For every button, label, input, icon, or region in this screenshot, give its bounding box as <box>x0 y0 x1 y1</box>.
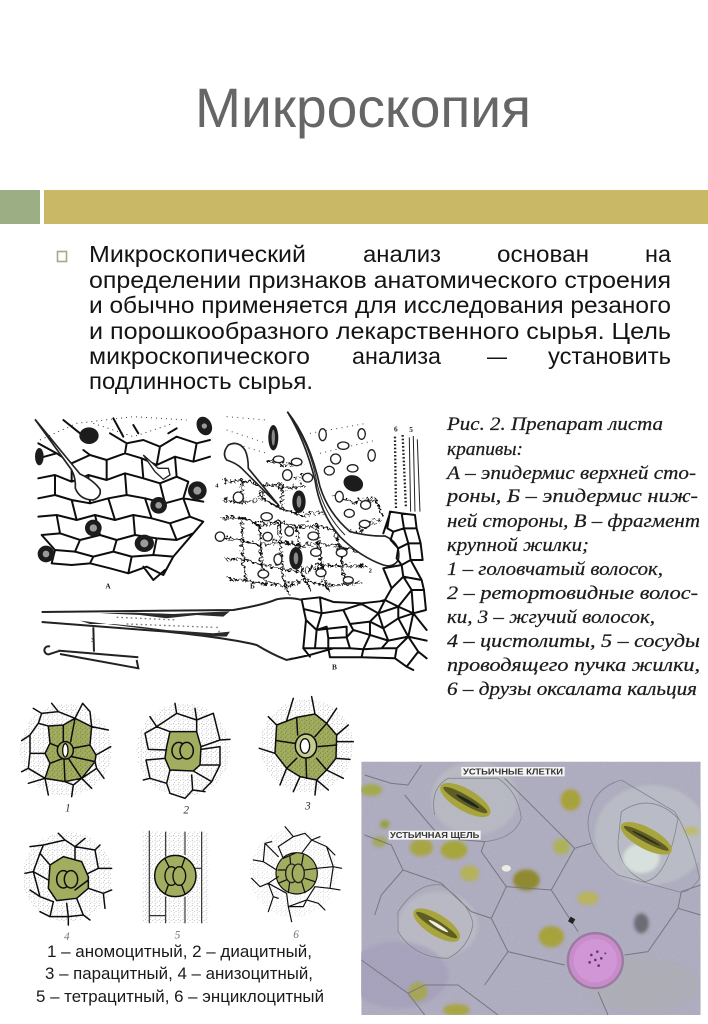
body text: анализ <box>363 241 441 267</box>
icon: retort hair <box>35 419 100 500</box>
figure caption: крупной жилки; <box>447 535 589 556</box>
legend of stomatal types: 3 – парацитный, 4 – анизоцитный, <box>45 964 313 983</box>
panel B: lower epidermis: 2 <box>369 568 373 575</box>
figure: nettle leaf preparation <box>35 412 427 671</box>
green square <box>0 190 40 224</box>
icon: capitate hair small <box>143 455 170 479</box>
stoma type 5 <box>143 831 208 923</box>
type numerals: 2 <box>183 804 189 816</box>
body text <box>89 241 671 394</box>
type numerals: 6 <box>293 929 299 941</box>
type numerals: 4 <box>64 931 70 943</box>
stoma type 4 <box>23 832 113 925</box>
dotted top edge B <box>227 417 377 453</box>
panel V: vein fragment <box>42 424 427 671</box>
pink stained cell <box>567 932 624 989</box>
background tonal patches <box>595 785 708 885</box>
title: Микроскопия <box>195 76 531 139</box>
figure caption: Рис. 2. Препарат листа <box>446 414 663 435</box>
stoma type 1 <box>20 703 112 797</box>
body text: Микроскопический <box>89 241 306 267</box>
bullet marker <box>58 252 66 262</box>
stoma type 3 <box>259 697 353 795</box>
type numerals: 1 <box>65 803 71 815</box>
figure caption: ки, 3 – жгучий волосок, <box>447 607 655 628</box>
figure: stomatal types <box>20 697 353 943</box>
figure caption: крапивы: <box>447 439 523 460</box>
dotted top edge <box>40 417 187 440</box>
pale guard cell halo <box>623 843 660 873</box>
figure caption: 1 – головчатый волосок, <box>447 559 663 580</box>
body text: основан <box>497 241 589 267</box>
body text: анализа <box>352 343 441 369</box>
stinging hair <box>42 598 302 660</box>
panel V: vein fragment: 5 <box>409 425 413 434</box>
body text: и обычно применяется для исследования резаного <box>89 292 671 318</box>
panel label B: Б <box>250 581 255 590</box>
figure caption: роны, Б – эпидермис ниж- <box>445 486 698 507</box>
panel A: upper epidermis <box>35 414 215 590</box>
cell walls <box>361 765 701 1015</box>
figure caption: 4 – цистолиты, 5 – сосуды <box>447 631 700 652</box>
stoma type 6 <box>249 827 342 922</box>
legend of stomatal types: 1 – аномоцитный, 2 – диацитный, <box>47 942 312 961</box>
figure caption: проводящего пучка жилки, <box>447 655 700 676</box>
panel label A: А <box>105 581 111 590</box>
micrograph of stomata <box>348 762 708 1016</box>
panel B: lower epidermis: 4 <box>215 482 219 489</box>
callout: guard cells: УСТЬИЧНЫЕ КЛЕТКИ <box>463 768 563 777</box>
stoma type 2 <box>137 703 230 798</box>
panel V: vein fragment: В <box>332 662 337 671</box>
figure caption <box>445 414 700 700</box>
gold bar <box>44 190 708 224</box>
vein cells <box>290 512 427 670</box>
callout: stomatal pore: УСТЬИЧНАЯ ЩЕЛЬ <box>390 831 480 840</box>
icon: stomata <box>215 429 375 583</box>
chloroplast blobs <box>561 789 581 811</box>
figure caption: 6 – друзы оксалата кальция <box>447 679 697 700</box>
stomata <box>440 782 490 818</box>
figure caption: ней стороны, В – фрагмент <box>447 511 700 532</box>
body text: установить <box>548 343 671 369</box>
small light specks <box>502 865 511 872</box>
header band <box>0 190 708 224</box>
panel V: vein fragment: 6 <box>394 424 398 433</box>
body text: подлинность сырья. <box>89 368 313 394</box>
icon: cystoliths <box>35 414 215 562</box>
body text: определении признаков анатомического строения <box>89 267 671 293</box>
icon: capitate hair B <box>225 443 279 505</box>
panel B: lower epidermis <box>215 412 399 592</box>
type numerals: 3 <box>304 801 311 813</box>
figure caption: 2 – ретортовидные волос- <box>447 583 698 604</box>
body text: на <box>645 241 671 267</box>
body text: — <box>487 343 507 369</box>
icon: vessels and druses <box>395 435 420 512</box>
icon: long retort hair <box>287 412 399 566</box>
type numerals: 5 <box>175 929 181 941</box>
legend of stomatal types: 5 – тетрацитный, 6 – энциклоцитный <box>36 987 324 1006</box>
type numerals <box>64 801 311 943</box>
body text: микроскопического <box>89 343 310 369</box>
small detail hair 3 <box>44 627 138 668</box>
icon: cystoliths B <box>268 425 365 570</box>
figure caption: А – эпидермис верхней сто- <box>445 463 696 484</box>
panel V: vein fragment: 3 <box>91 637 95 644</box>
body text: и порошкообразного лекарственного сырья. Цель <box>89 318 671 344</box>
legend of stomatal types <box>36 942 324 1006</box>
